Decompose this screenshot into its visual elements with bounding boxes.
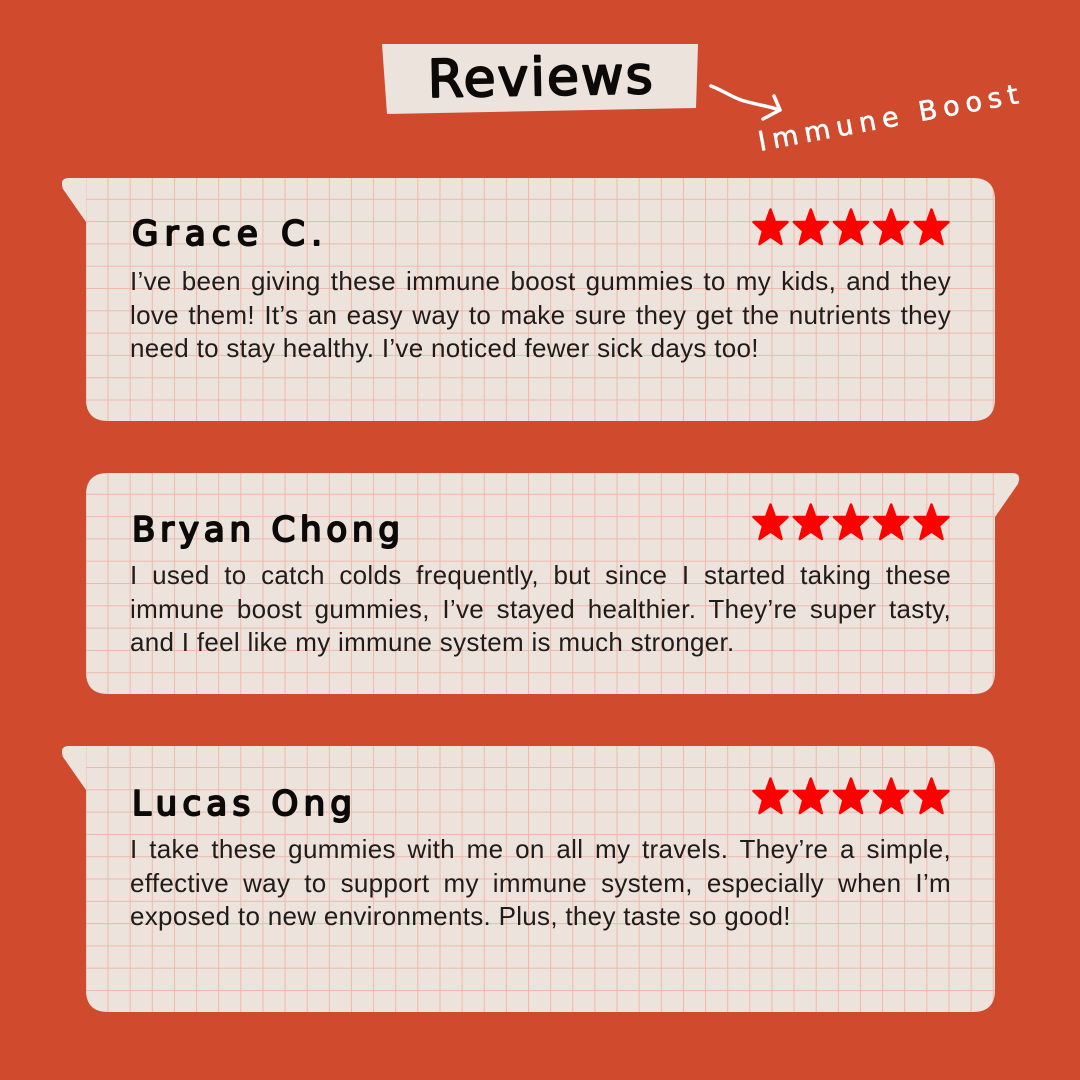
review text: immune boost gummies, I’ve stayed healthier. They’re super tasty,: [130, 594, 951, 624]
star rating: [754, 504, 948, 539]
review text: love them! It’s an easy way to make sure they get the nutrients they: [130, 300, 951, 330]
star rating: [754, 210, 948, 244]
speech bubble: [62, 746, 995, 1012]
reviewer name: Bryan Chong: [132, 510, 400, 550]
review text: exposed to new environments. Plus, they taste so good!: [130, 901, 791, 931]
arrow: [711, 86, 780, 119]
review text: [130, 266, 951, 363]
speech bubble: [62, 178, 995, 421]
star rating: [754, 778, 948, 813]
review text: I take these gummies with me on all my travels. They’re a simple,: [130, 834, 951, 864]
product name: Immune Boost: [756, 79, 1021, 158]
speech bubble: [86, 473, 1019, 694]
review text: [130, 834, 951, 931]
review text: effective way to support my immune system, especially when I’m: [130, 868, 951, 898]
review text: [130, 560, 951, 657]
panel: review Lucas Ong: [62, 746, 995, 1012]
title label: [382, 44, 698, 114]
review text: I used to catch colds frequently, but since I started taking these: [130, 560, 951, 590]
panel: review Grace C.: [62, 178, 995, 421]
reviewer name: Lucas Ong: [132, 784, 352, 824]
review text: need to stay healthy. I’ve noticed fewer sick days too!: [130, 333, 759, 363]
title label: Reviews: [427, 46, 653, 110]
reviewer name: Grace C.: [132, 214, 322, 254]
header: [382, 44, 1021, 158]
review text: I’ve been giving these immune boost gummies to my kids, and they: [130, 266, 951, 296]
panel: review Bryan Chong: [86, 473, 1020, 694]
review text: and I feel like my immune system is much stronger.: [130, 627, 735, 657]
